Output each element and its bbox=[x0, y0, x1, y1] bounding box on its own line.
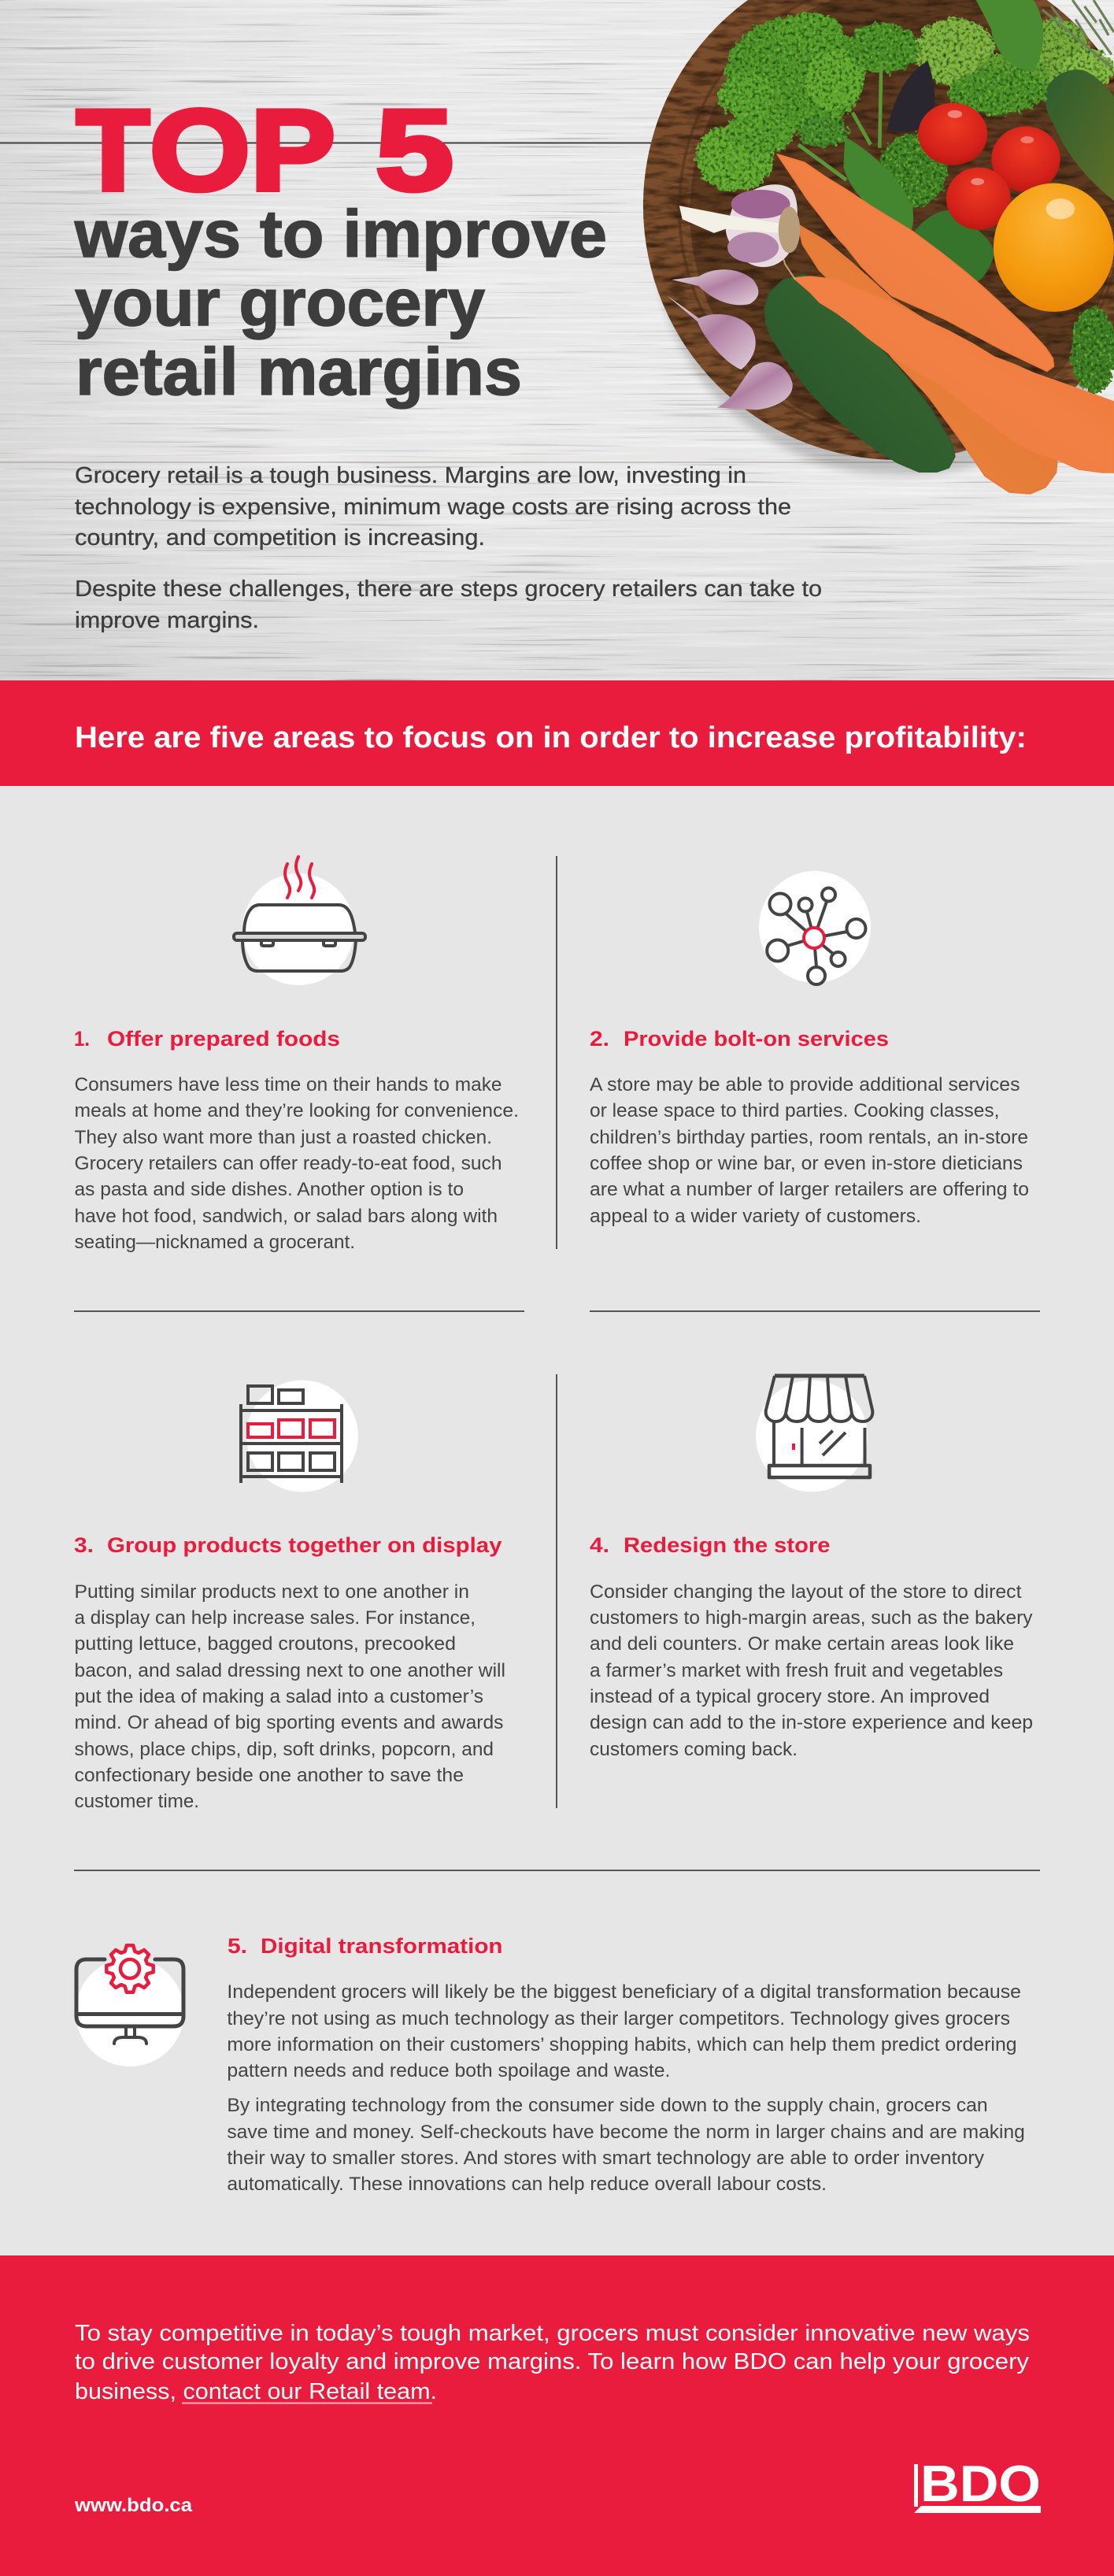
text block 1: Grocery retailers can offer ready-to-eat food, such bbox=[74, 1153, 502, 1174]
text block 5: By integrating technology from the consumer side down to the supply chain, grocers can bbox=[227, 2095, 988, 2116]
text block 5 bbox=[227, 1981, 1025, 2195]
text block 1: Consumers have less time on their hands to make bbox=[74, 1074, 502, 1095]
panel: 2 provide bolt-on services bbox=[590, 871, 1029, 1227]
carrot three bbox=[794, 276, 1114, 473]
icon: monitor with gear bbox=[76, 1945, 184, 2066]
title: TOP 5: O bbox=[150, 86, 250, 214]
hero photo: wooden board with vegetables bbox=[643, 0, 1114, 494]
panel: 4 redesign the store bbox=[590, 1376, 1033, 1760]
heading 4: Redesign the store bbox=[624, 1533, 830, 1557]
heading 3: 3. bbox=[74, 1533, 94, 1557]
title: subtitle lines: ways to improve bbox=[74, 197, 607, 271]
parsley stems bbox=[798, 65, 881, 180]
text block 3: customer time. bbox=[74, 1791, 199, 1812]
banner heading: Here are five areas to focus on in order to increase profitability: bbox=[75, 721, 1027, 754]
text block 5: they’re not using as much technology as their larger competitors. Technology gives grocers bbox=[227, 2008, 1010, 2029]
heading 1: 1. bbox=[74, 1027, 90, 1051]
closing text: to drive customer loyalty and improve margins. To learn how BDO can help your grocery bbox=[75, 2349, 1030, 2374]
text block 2: A store may be able to provide additional services bbox=[590, 1074, 1020, 1095]
text block 4 bbox=[590, 1581, 1033, 1760]
dividers bbox=[74, 856, 1040, 1870]
text block 2: coffee shop or wine bar, or even in-store dieticians bbox=[590, 1153, 1023, 1174]
heading 5: 5. bbox=[228, 1934, 247, 1958]
text block 3: confectionary beside one another to save the bbox=[74, 1765, 464, 1786]
green leaves bbox=[843, 136, 913, 233]
text block 3: putting lettuce, bagged croutons, precooked bbox=[74, 1633, 456, 1655]
heading 5: Digital transformation bbox=[261, 1934, 502, 1958]
text block 4: and deli counters. Or make certain areas look like bbox=[590, 1633, 1014, 1655]
title bbox=[74, 86, 607, 409]
title: subtitle lines bbox=[74, 197, 607, 409]
icon: takeout box with steam bbox=[234, 857, 365, 985]
text block 5: pattern needs and reduce both spoilage and waste. bbox=[227, 2060, 670, 2081]
footer panel bbox=[0, 2255, 1114, 2576]
title: subtitle lines: your grocery bbox=[75, 265, 485, 339]
text block 2 bbox=[590, 1074, 1029, 1227]
garlic cloves bbox=[668, 269, 793, 410]
panel: 3 group products together on display bbox=[74, 1380, 505, 1812]
icon: network nodes bbox=[759, 871, 871, 984]
text block 1: seating—nicknamed a grocerant. bbox=[74, 1232, 355, 1253]
intro text: Despite these challenges, there are steps grocery retailers can take to bbox=[75, 576, 822, 602]
text block 3 bbox=[74, 1581, 505, 1812]
text block 4: design can add to the in-store experience and keep bbox=[590, 1712, 1033, 1733]
closing text: To stay competitive in today’s tough market, grocers must consider innovative new ways bbox=[75, 2321, 1030, 2346]
text block 3: mind. Or ahead of big sporting events and awards bbox=[74, 1712, 504, 1733]
parsley: upper bunch bbox=[696, 13, 919, 191]
intro text: technology is expensive, minimum wage costs are rising across the bbox=[75, 495, 791, 520]
intro text: improve margins. bbox=[75, 608, 259, 633]
text block 2: appeal to a wider variety of customers. bbox=[590, 1206, 921, 1227]
heading 4: 4. bbox=[590, 1533, 609, 1557]
heading 2: Provide bolt-on services bbox=[624, 1027, 889, 1051]
text block 5: more information on their customers’ shopping habits, which can help them predict ordering bbox=[227, 2034, 1017, 2055]
title: subtitle lines: retail margins bbox=[76, 335, 522, 409]
text block 2: are what a number of larger retailers are offering to bbox=[590, 1179, 1029, 1200]
text block 1: meals at home and they’re looking for convenience. bbox=[74, 1100, 519, 1121]
title: TOP 5: P bbox=[250, 86, 335, 214]
panel: 1 offer prepared foods bbox=[74, 857, 519, 1253]
icon: storefront bbox=[756, 1376, 872, 1492]
icon: store shelves bbox=[241, 1380, 358, 1492]
text block 3: bacon, and salad dressing next to one another will bbox=[74, 1660, 505, 1681]
panel: 5 digital transformation bbox=[76, 1934, 1025, 2195]
intro text bbox=[75, 463, 822, 633]
text block 1: as pasta and side dishes. Another option is to bbox=[74, 1179, 464, 1200]
parsley: middle and right sprigs bbox=[878, 69, 1114, 394]
text block 1: They also want more than just a roasted chicken. bbox=[74, 1127, 492, 1148]
rosemary bbox=[1042, 0, 1114, 68]
text block 1 bbox=[74, 1074, 519, 1253]
tomatoes bbox=[918, 103, 1060, 230]
grey content panel bbox=[0, 786, 1114, 2255]
text block 1: have hot food, sandwich, or salad bars along with bbox=[74, 1206, 498, 1227]
red banner bbox=[0, 680, 1114, 786]
basil leaf bbox=[976, 0, 1043, 72]
text block 4: a farmer’s market with fresh fruit and vegetables bbox=[590, 1660, 1003, 1681]
carrot root tail bbox=[761, 247, 795, 280]
right cucumber bbox=[1045, 69, 1114, 201]
text block 4: instead of a typical grocery store. An improved bbox=[590, 1686, 990, 1707]
text block 2: or lease space to third parties. Cooking classes, bbox=[590, 1100, 1000, 1121]
BDO logo: BDO bbox=[920, 2455, 1041, 2512]
text block 5: their way to smaller stores. And stores with smart technology are able to order inventory bbox=[227, 2148, 984, 2169]
text block 5: Independent grocers will likely be the biggest beneficiary of a digital transformation because bbox=[227, 1981, 1021, 2003]
text block 4: customers to high-margin areas, such as the bakery bbox=[590, 1607, 1033, 1629]
title: TOP 5 bbox=[76, 86, 453, 214]
large cucumber bbox=[764, 274, 955, 472]
intro text: country, and competition is increasing. bbox=[75, 525, 485, 550]
text block 4: Consider changing the layout of the store to direct bbox=[590, 1581, 1022, 1603]
heading 1: Offer prepared foods bbox=[107, 1027, 340, 1051]
text block 3: put the idea of making a salad into a customer’s bbox=[74, 1686, 483, 1707]
heading 3: Group products together on display bbox=[107, 1533, 502, 1557]
garlic bulb bbox=[679, 184, 800, 267]
closing text: business, contact our Retail team. bbox=[75, 2379, 437, 2404]
text block 5: automatically. These innovations can help reduce overall labour costs. bbox=[227, 2174, 827, 2195]
text block 5: save time and money. Self-checkouts have become the norm in larger chains and are making bbox=[227, 2122, 1025, 2143]
lettuce bbox=[914, 17, 1114, 109]
heading 2: 2. bbox=[590, 1027, 609, 1051]
text block 2: children’s birthday parties, room rentals, an in-store bbox=[590, 1127, 1028, 1148]
dark leaf bbox=[887, 61, 935, 132]
text block 3: a display can help increase sales. For instance, bbox=[74, 1607, 476, 1629]
carrot one bbox=[777, 154, 1053, 371]
small carrot behind bbox=[798, 225, 1057, 494]
hero background: white wood planks bbox=[0, 0, 1114, 680]
yellow tomato bbox=[994, 183, 1114, 312]
text block 3: Putting similar products next to one another in bbox=[74, 1581, 469, 1603]
text block 4: customers coming back. bbox=[590, 1739, 798, 1760]
title: TOP 5: T bbox=[76, 86, 150, 214]
intro text: Grocery retail is a tough business. Margins are low, investing in bbox=[75, 463, 746, 488]
text block 3: shows, place chips, dip, soft drinks, popcorn, and bbox=[74, 1739, 494, 1760]
title: TOP 5: 5 bbox=[376, 86, 453, 214]
website: www.bdo.ca bbox=[74, 2495, 193, 2516]
closing text bbox=[75, 2321, 1030, 2404]
